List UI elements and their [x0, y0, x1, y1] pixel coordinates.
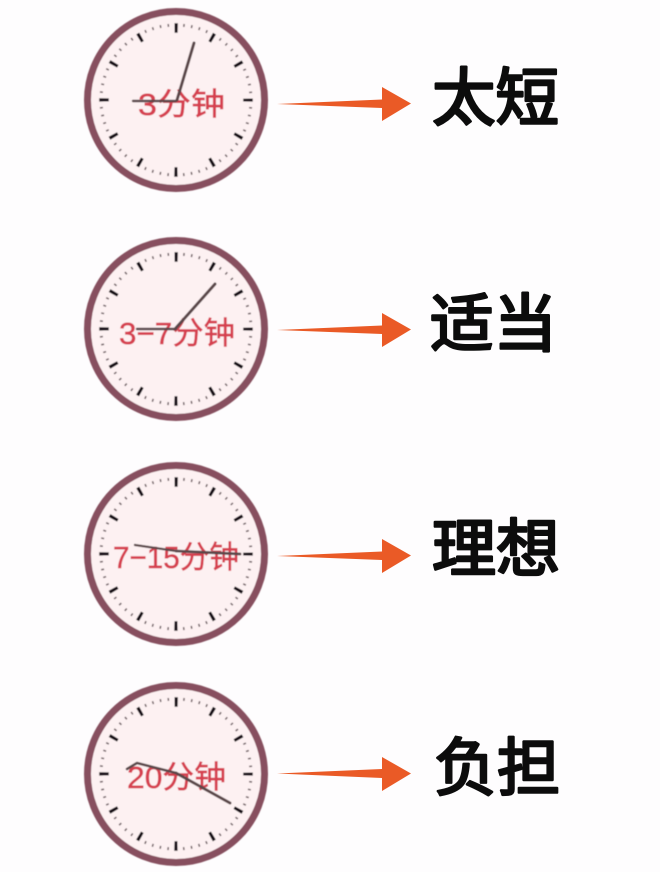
clock label: 20分钟: 20分钟 — [127, 760, 226, 795]
arrow: row 2 — [277, 313, 411, 347]
clock hands — [133, 43, 194, 101]
clock label: 7-15分钟: 7−15分钟 — [113, 540, 239, 575]
clock: 20 minutes — [88, 686, 264, 862]
label: 理想: 理想 — [432, 499, 560, 590]
arrow: row 1 — [277, 87, 411, 121]
clock hands — [127, 763, 230, 803]
clock label: 3-7分钟: 3−7分钟 — [119, 316, 235, 351]
clock: 3-7 minutes — [88, 240, 264, 418]
label: 负担: 负担 — [434, 718, 560, 809]
clock label: 3分钟: 3分钟 — [138, 87, 225, 122]
arrow: row 4 — [277, 757, 411, 791]
label: 适当: 适当 — [430, 274, 557, 365]
clock hands — [137, 284, 215, 329]
clock hands — [135, 545, 240, 554]
clock: 7-15 minutes — [88, 466, 264, 642]
label: 太短: 太短 — [432, 48, 559, 139]
arrow: row 3 — [277, 539, 411, 573]
clock: 3 minutes — [88, 12, 264, 188]
